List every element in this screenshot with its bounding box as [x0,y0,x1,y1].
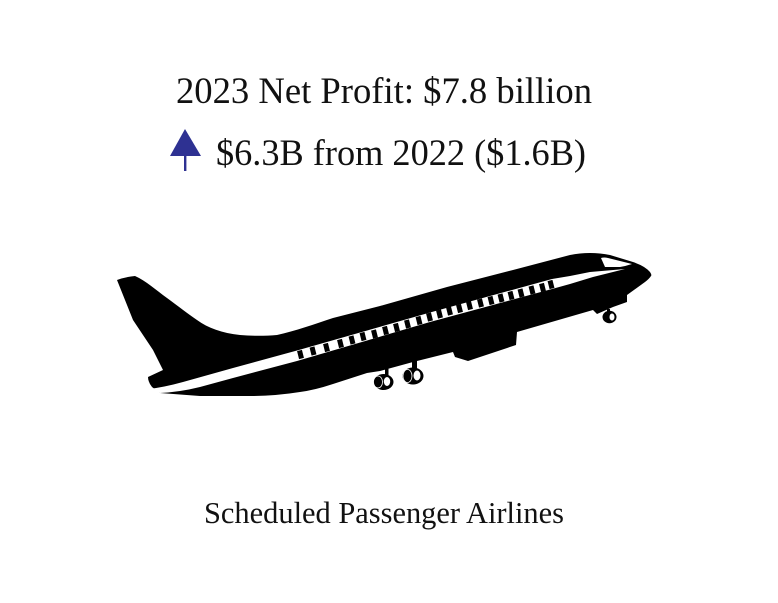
passenger windows [300,280,552,358]
cheatline stripe [149,269,625,393]
icon: up arrow [170,129,201,171]
title: net profit: 2023 Net Profit: $7.8 billion [176,70,592,111]
caption: Scheduled Passenger Airlines [204,495,564,530]
change from 2022: $6.3B from 2022 ($1.6B) [216,132,586,173]
airplane silhouette [117,253,651,396]
landing gear: nose wheel [602,309,616,323]
landing gear: rear wheels [374,360,424,390]
cockpit window [601,258,632,267]
plane body [117,253,651,396]
